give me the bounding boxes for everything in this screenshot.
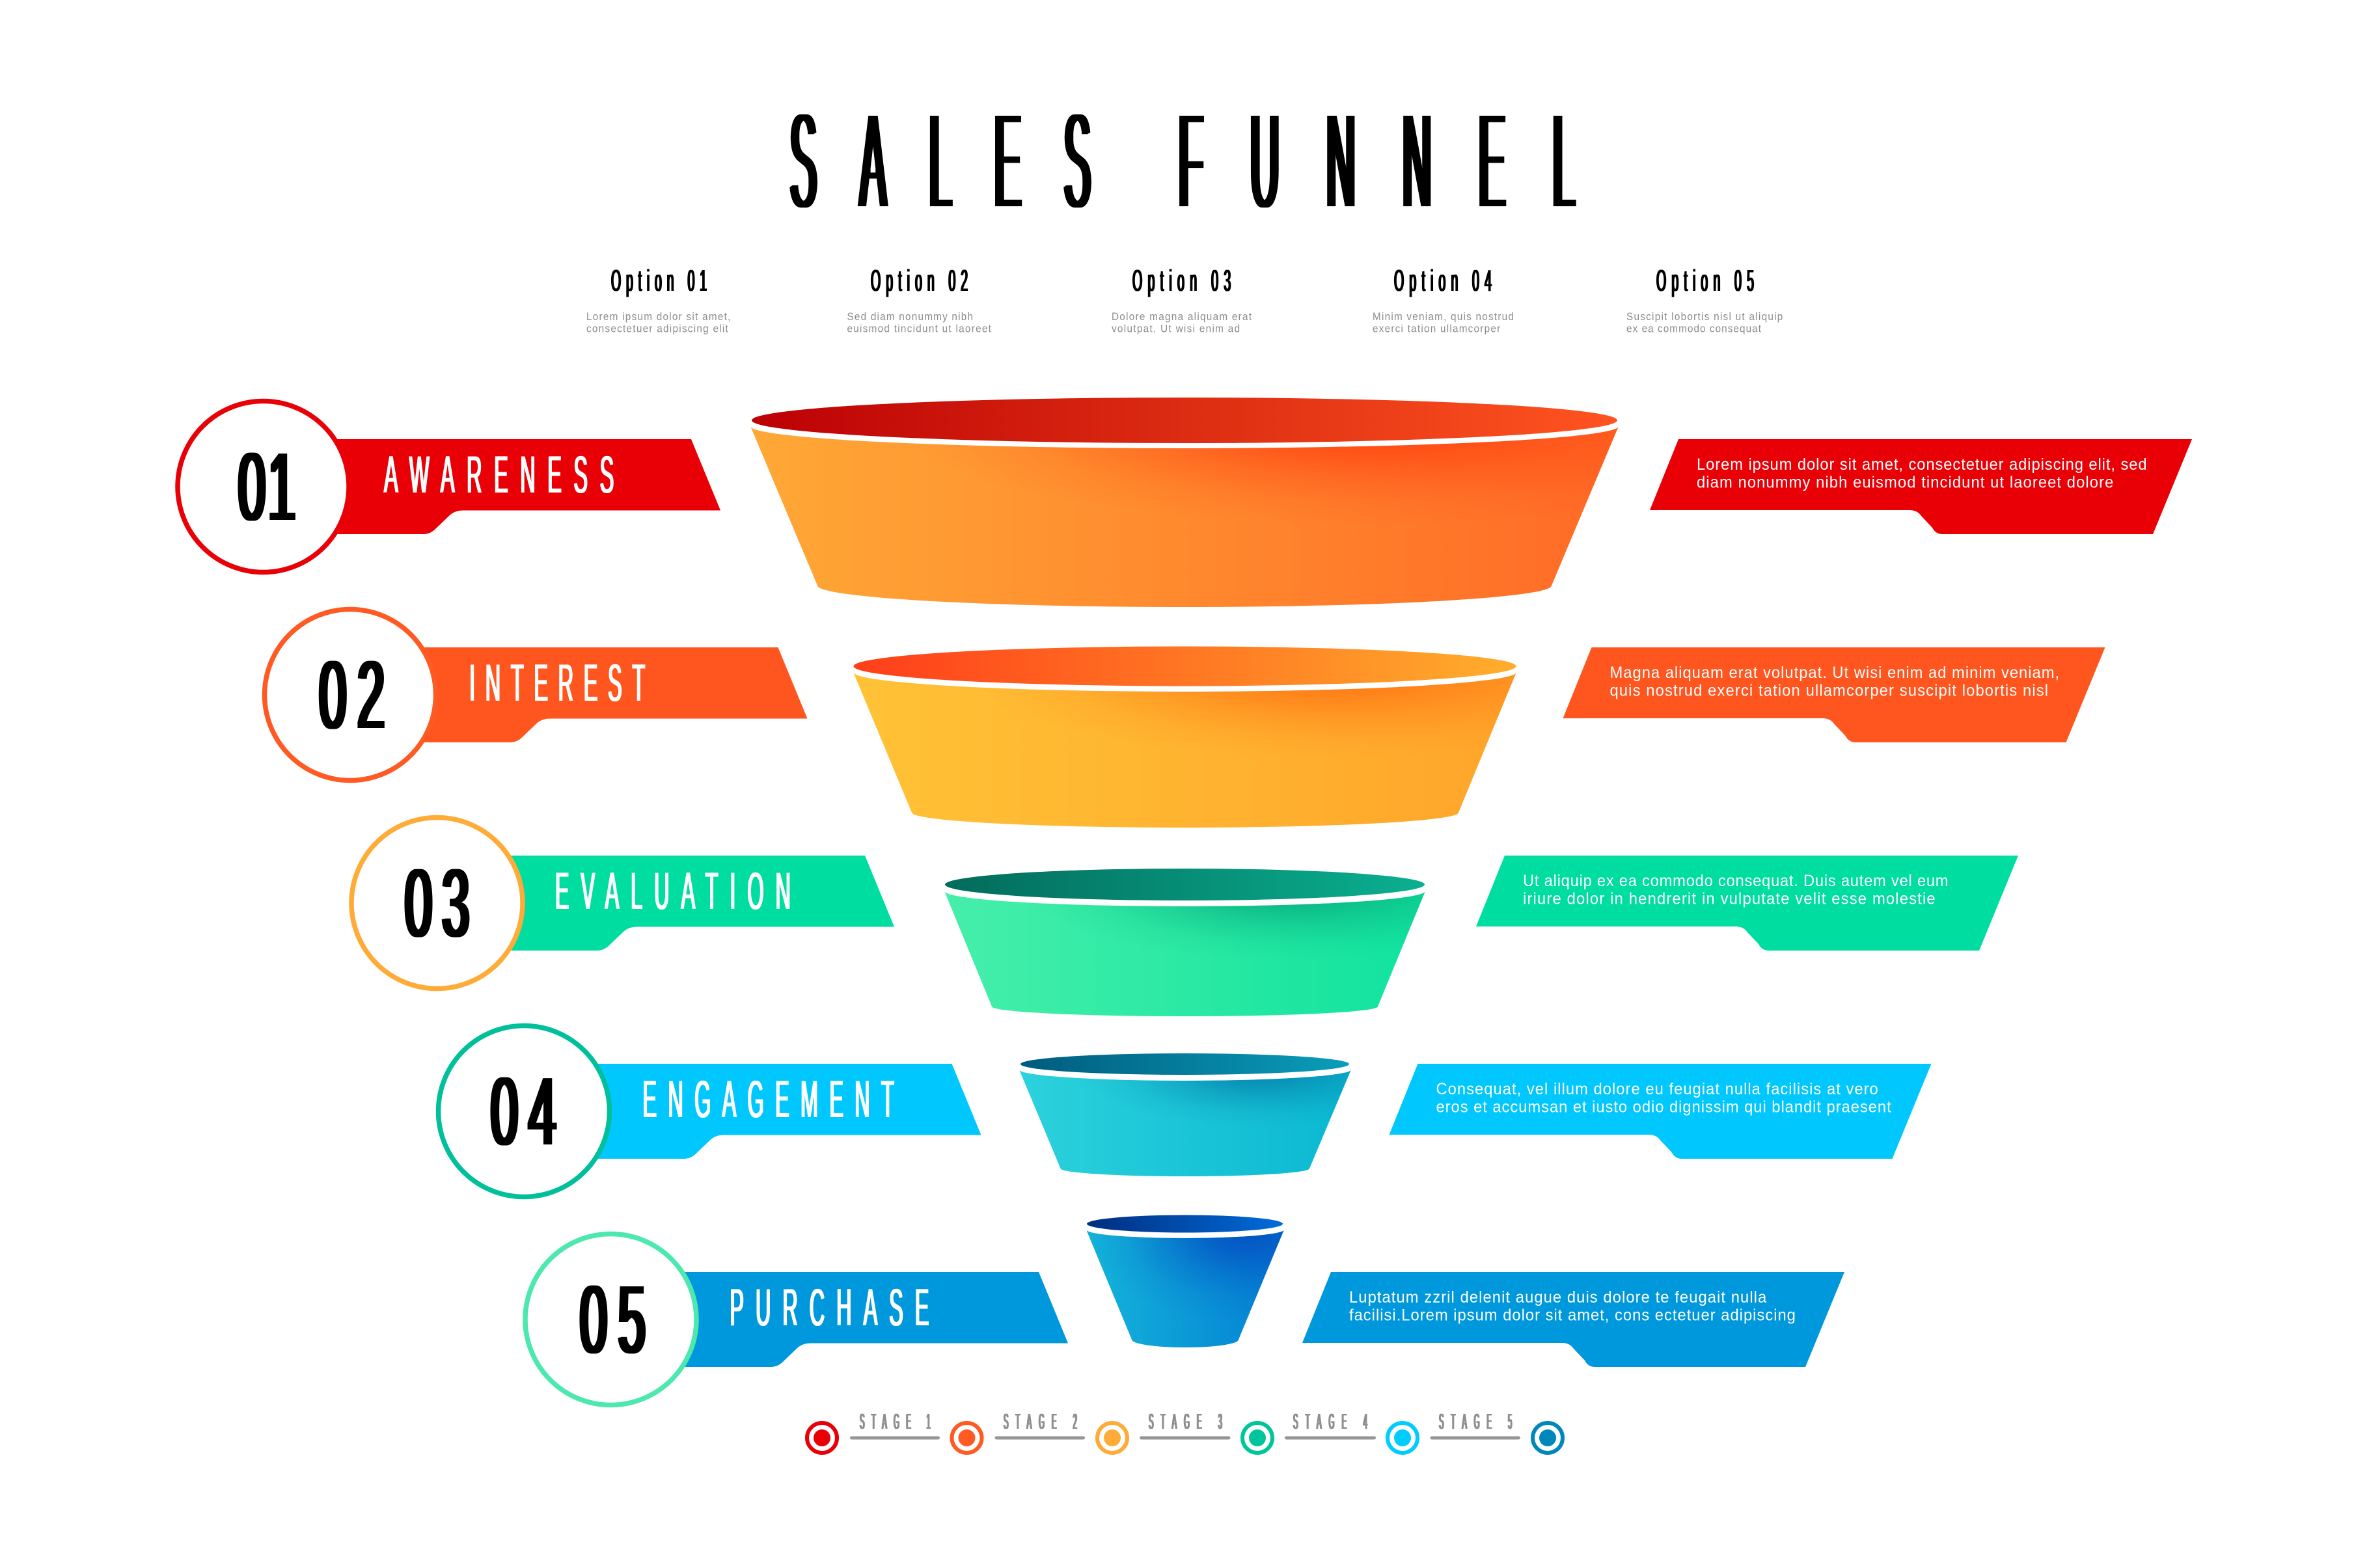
title: SALES FUNNEL xyxy=(790,83,1623,237)
option 01 xyxy=(586,264,730,335)
option 01: consectetuer adipiscing elit xyxy=(586,323,728,335)
label: interest: INTEREST xyxy=(469,654,645,712)
tier 5 body xyxy=(1086,1230,1284,1347)
marker 2 xyxy=(952,1423,981,1453)
ribbon: engagement xyxy=(522,1064,981,1159)
description text: iriure dolor in hendrerit in vulputate velit esse molestie xyxy=(1523,890,1936,908)
option 02: Sed diam nonummy nibh xyxy=(847,310,973,323)
option 03: volutpat. Ut wisi enim ad xyxy=(1112,323,1240,335)
ribbon: purchase xyxy=(609,1272,1068,1367)
option 02 xyxy=(847,264,991,335)
option 04: Minim veniam, quis nostrud xyxy=(1373,310,1514,323)
description text: Consequat, vel illum dolore eu feugiat nulla facilisis at vero xyxy=(1436,1080,1878,1098)
marker 5 xyxy=(1388,1423,1417,1453)
description text: facilisi.Lorem ipsum dolor sit amet, cons ectetuer adipiscing xyxy=(1349,1306,1796,1325)
tier 4 body xyxy=(1019,1070,1351,1176)
number circle 03 xyxy=(351,817,523,989)
description text xyxy=(1697,455,2147,492)
label: evaluation: EVALUATION xyxy=(555,862,791,921)
stage 4 segment: STAGE 4 xyxy=(1293,1411,1367,1434)
option 01: Option 01 xyxy=(611,264,707,297)
panel: stage 4 description xyxy=(1389,1064,1932,1159)
tier 5 inner opening xyxy=(1087,1215,1283,1232)
description text xyxy=(1349,1288,1796,1325)
tier 2 inner opening xyxy=(854,647,1516,686)
description text xyxy=(1610,664,2059,700)
tier 1 inner opening xyxy=(752,398,1617,443)
description text: Magna aliquam erat volutpat. Ut wisi enim ad minim veniam, xyxy=(1610,664,2059,682)
option headers xyxy=(586,264,1783,335)
description text: quis nostrud exerci tation ullamcorper suscipit lobortis nisl xyxy=(1610,682,2048,700)
description text xyxy=(1523,872,1949,908)
description text xyxy=(1436,1080,1891,1116)
funnel tier 1 xyxy=(750,398,1619,607)
funnel tier 2 xyxy=(853,647,1516,828)
number circle 04: 04 xyxy=(491,1057,567,1165)
panel: stage 1 description xyxy=(1650,439,2192,534)
tier 3 body xyxy=(944,891,1425,1016)
number circle 01 xyxy=(178,401,349,573)
number circle 05 xyxy=(525,1234,696,1405)
panel: stage 4 left label xyxy=(439,1025,981,1197)
tier 1 body xyxy=(750,426,1619,607)
ribbon: awareness xyxy=(262,439,720,534)
option 04: Option 04 xyxy=(1394,264,1492,297)
number circle 04 xyxy=(439,1025,609,1197)
option 02: Option 02 xyxy=(871,264,968,297)
option 01: Lorem ipsum dolor sit amet, xyxy=(586,310,730,323)
ribbon xyxy=(1389,1064,1932,1159)
panel: stage 5 left label xyxy=(525,1234,1068,1405)
panel: stage 2 left label xyxy=(264,609,807,781)
number circle 01: 01 xyxy=(238,433,298,540)
panel: stage 3 description xyxy=(1476,856,2018,951)
stage 2 segment: STAGE 2 xyxy=(1004,1411,1077,1434)
option 03: Option 03 xyxy=(1132,264,1231,297)
funnel tier 5 xyxy=(1086,1215,1284,1347)
tier 2 body xyxy=(853,672,1516,828)
label: purchase: PURCHASE xyxy=(730,1278,929,1337)
description text: Luptatum zzril delenit augue duis dolore te feugait nulla xyxy=(1349,1288,1767,1306)
option 05: Suscipit lobortis nisl ut aliquip xyxy=(1626,310,1783,323)
marker 6 xyxy=(1533,1423,1563,1453)
ribbon xyxy=(1650,439,2192,534)
stage 5 segment: STAGE 5 xyxy=(1439,1411,1512,1434)
option 05 xyxy=(1626,264,1783,335)
option 04: exerci tation ullamcorper xyxy=(1373,323,1501,335)
description text: Ut aliquip ex ea commodo consequat. Duis autem vel eum xyxy=(1523,872,1949,890)
label: engagement: ENGAGEMENT xyxy=(642,1070,894,1129)
option 05: Option 05 xyxy=(1656,264,1754,297)
description text: eros et accumsan et iusto odio dignissim qui blandit praesent xyxy=(1436,1098,1891,1116)
marker 1 xyxy=(807,1423,837,1453)
tier 3 inner opening xyxy=(945,869,1425,900)
panel: stage 3 left label xyxy=(351,817,894,989)
panel: stage 5 description xyxy=(1302,1272,1844,1367)
ribbon: evaluation xyxy=(435,856,894,951)
stage 3 segment: STAGE 3 xyxy=(1149,1411,1222,1434)
description text: Lorem ipsum dolor sit amet, consectetuer adipiscing elit, sed xyxy=(1697,455,2147,474)
ribbon: interest xyxy=(349,647,807,742)
funnel tier 4 xyxy=(1019,1053,1351,1176)
marker 3 xyxy=(1097,1423,1127,1453)
number circle 02: 02 xyxy=(319,641,396,748)
stage timeline legend xyxy=(807,1411,1563,1453)
stage 1 segment: STAGE 1 xyxy=(860,1411,931,1434)
option 02: euismod tincidunt ut laoreet xyxy=(847,323,991,335)
option 04 xyxy=(1373,264,1514,335)
number circle 02 xyxy=(264,609,436,781)
tier 4 inner opening xyxy=(1020,1053,1349,1075)
ribbon xyxy=(1302,1272,1844,1367)
option 03: Dolore magna aliquam erat xyxy=(1112,310,1252,323)
marker 4 xyxy=(1242,1423,1272,1453)
label: awareness: AWARENESS xyxy=(384,446,614,504)
description text: diam nonummy nibh euismod tincidunt ut laoreet dolore xyxy=(1697,474,2113,492)
panel: stage 1 left label xyxy=(178,401,720,573)
funnel tier 3 xyxy=(944,869,1425,1016)
ribbon xyxy=(1476,856,2018,951)
option 05: ex ea commodo consequat xyxy=(1626,323,1761,335)
ribbon xyxy=(1563,647,2105,742)
panel: stage 2 description xyxy=(1563,647,2105,742)
option 03 xyxy=(1112,264,1252,335)
number circle 05: 05 xyxy=(580,1265,657,1373)
number circle 03: 03 xyxy=(405,849,480,956)
